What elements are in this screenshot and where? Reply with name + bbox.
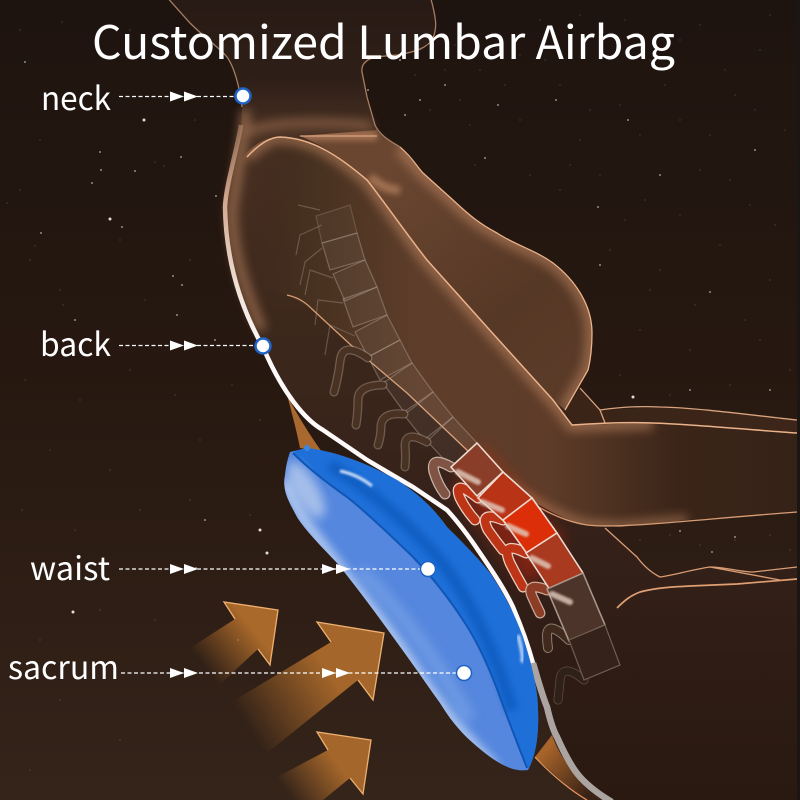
red and lower vertebrae [451,443,620,680]
process highlights [458,472,570,602]
callout: neck [41,74,250,120]
upper vertebrae [316,205,477,467]
white band [225,125,533,663]
arrow 2 [230,622,384,753]
callout: neck: neck [41,74,111,120]
chest fill [300,130,592,410]
airbag left pale end [284,457,330,522]
soft inner glows [247,137,687,527]
arm and forearm fill [225,137,797,527]
bright body contours [165,0,797,608]
orange arrows [187,602,384,800]
callout: back: back [40,320,111,366]
airbag outer pale rim [284,480,495,768]
airbag body [284,448,538,770]
arrow 3 [277,732,371,800]
blue lumbar airbag [280,440,545,770]
shoulder and back glow [232,110,372,330]
chair back band [225,125,612,800]
lower orange contour [535,735,612,800]
arrow 1 [187,602,278,687]
lower gray band [533,663,612,800]
right edge strip [797,0,800,800]
airbag dark band [330,465,512,710]
faint processes [296,205,355,355]
callout: sacrum: sacrum [8,643,119,689]
airbag upper lobe [293,440,545,770]
airbag lower sheen [360,570,470,720]
callout: waist: waist [30,544,110,590]
torso fill [165,0,800,800]
body silhouette [165,0,800,800]
orange ligament strip [287,395,322,452]
outlined processes [334,350,584,700]
airbag seam [293,453,527,768]
callout: waist [30,544,436,590]
airbag highlight [340,471,372,486]
callout: back [40,320,270,366]
callout: sacrum [8,643,472,689]
airbag valve [304,445,310,451]
title: Customized Lumbar Airbag [92,7,675,73]
red glow [455,445,565,590]
other forearm [565,388,797,433]
spine [296,205,620,700]
